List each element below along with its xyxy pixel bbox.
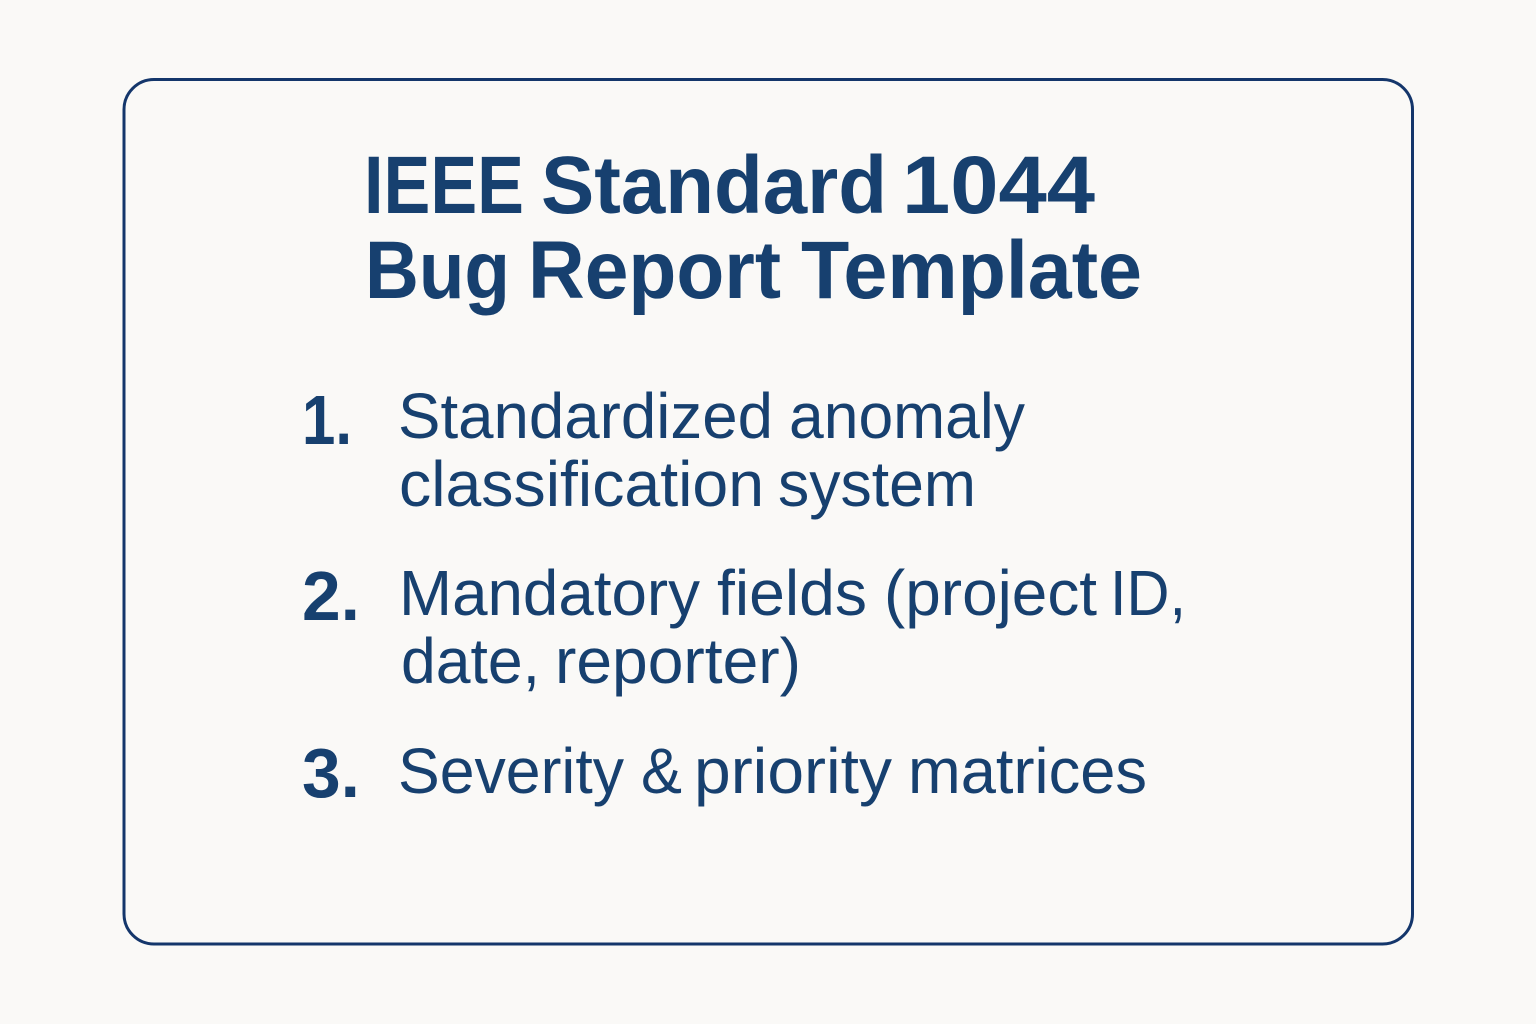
panel: bug report template card [124, 80, 1412, 944]
list item 2: fields [717, 557, 867, 629]
list item 2: (project [884, 557, 1097, 629]
list item 2: ID, [1110, 557, 1186, 629]
list item 3: 3. [302, 734, 360, 812]
title [364, 140, 1142, 316]
list item 1: classification [399, 448, 764, 520]
title: 1044 [902, 140, 1095, 231]
list item 3: matrices [908, 735, 1147, 807]
title: IEEE [364, 140, 524, 231]
list item 3: priority [694, 735, 892, 807]
list item 2: reporter) [555, 625, 801, 697]
list item 3: & [641, 735, 682, 807]
list item 1 [302, 380, 1025, 520]
title: Bug [365, 225, 510, 316]
list item 1: anomaly [789, 380, 1025, 452]
list item 3 [302, 734, 1147, 812]
list item 2: 2. [302, 557, 360, 635]
title: Standard [541, 140, 887, 231]
list item 2: date, [401, 625, 540, 697]
list item 3: Severity [398, 735, 624, 807]
title: Template [801, 225, 1142, 316]
list item 1: Standardized [398, 380, 773, 452]
list item 2: Mandatory [399, 557, 700, 629]
list item 1: 1. [302, 381, 352, 459]
title: Report [528, 225, 781, 316]
list item 1: system [778, 448, 976, 520]
list item 2 [302, 557, 1186, 697]
